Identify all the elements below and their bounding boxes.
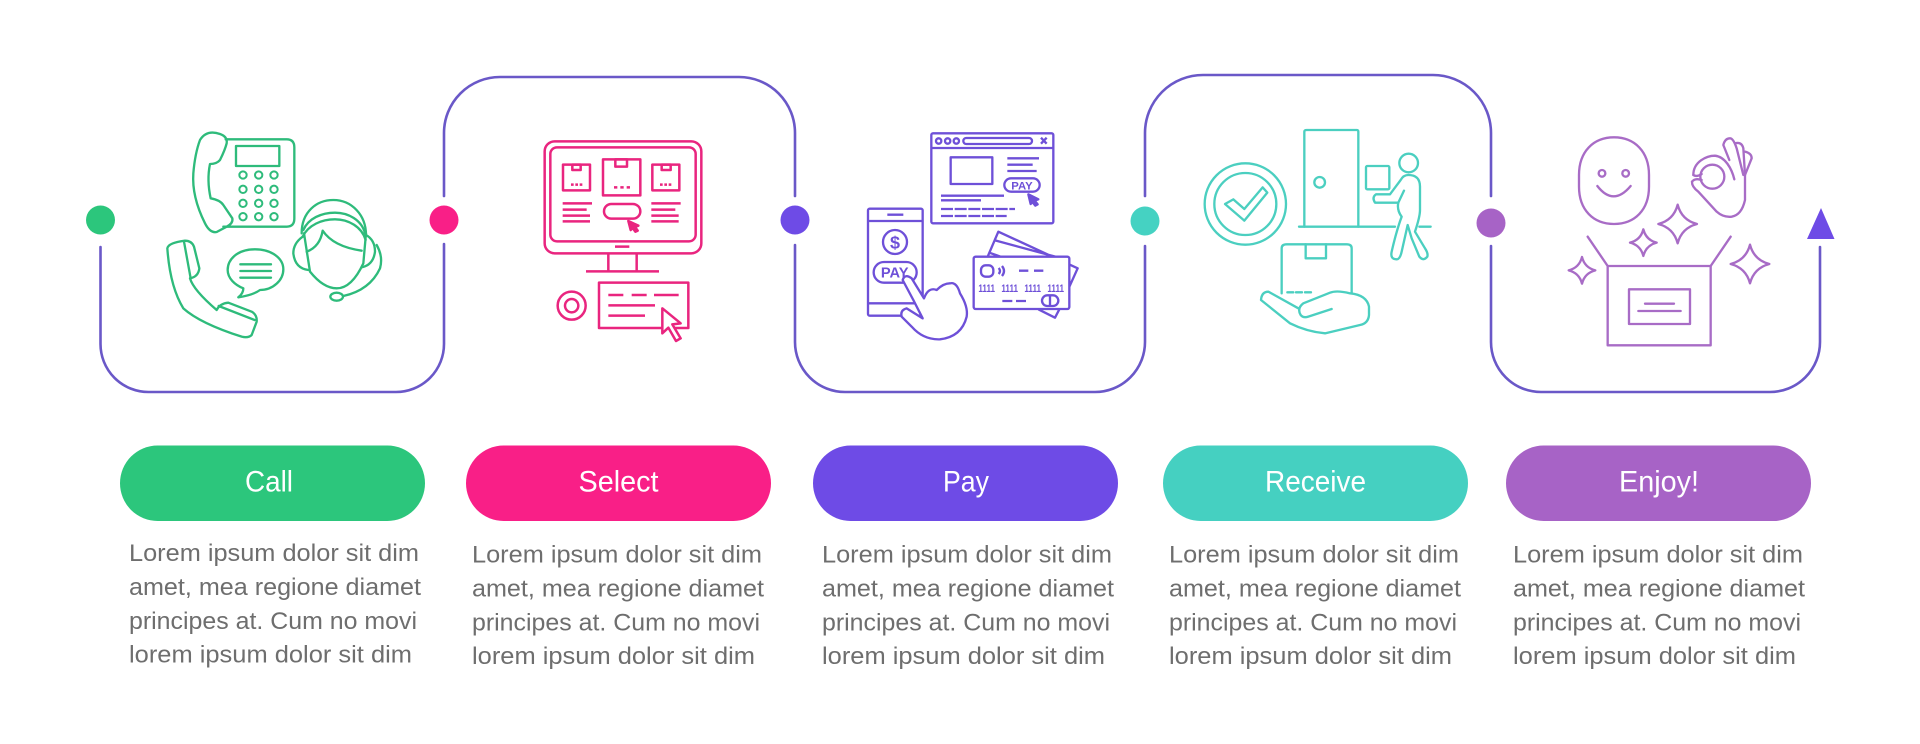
description: call: principes at. Cum no movi — [129, 608, 417, 635]
pill: Select — [466, 446, 771, 521]
timeline path — [100, 75, 1820, 392]
description: pay: principes at. Cum no movi — [822, 610, 1110, 637]
pill: Receive — [1163, 446, 1468, 521]
icon: receive — [1205, 130, 1431, 333]
description: select: Lorem ipsum dolor sit dim — [472, 542, 762, 569]
timeline node: call — [86, 206, 115, 234]
description: receive: principes at. Cum no movi — [1169, 610, 1457, 637]
icon: pay: 1111 — [1047, 283, 1064, 295]
description: enjoy: principes at. Cum no movi — [1513, 610, 1801, 637]
description: pay: amet, mea regione diamet — [822, 576, 1114, 603]
description: pay: lorem ipsum dolor sit dim — [822, 643, 1105, 670]
description: enjoy: amet, mea regione diamet — [1513, 576, 1805, 603]
icon: pay: 1111 — [1024, 283, 1041, 295]
pill: Enjoy: Enjoy! — [1619, 466, 1699, 498]
pill: Call: Call — [245, 466, 293, 498]
pill: Pay: Pay — [943, 466, 989, 498]
timeline node: enjoy — [1476, 208, 1506, 238]
icon: pay: $ — [890, 232, 900, 252]
description: enjoy: Lorem ipsum dolor sit dim — [1513, 542, 1803, 569]
description: call: amet, mea regione diamet — [129, 574, 421, 601]
description: call: Lorem ipsum dolor sit dim — [129, 540, 419, 567]
pill: Enjoy — [1506, 446, 1811, 521]
icon: pay: 1111 — [978, 283, 995, 295]
icon: pay — [868, 133, 1078, 339]
icon: pay: PAY — [881, 266, 909, 282]
icon: select — [545, 141, 701, 341]
description: call — [129, 540, 421, 668]
icon: enjoy — [1569, 137, 1769, 345]
pill: Receive: Receive — [1265, 466, 1366, 498]
pill: Call — [120, 446, 425, 521]
icon: call — [167, 133, 381, 337]
description: receive: lorem ipsum dolor sit dim — [1169, 643, 1452, 670]
description: call: lorem ipsum dolor sit dim — [129, 642, 412, 668]
description: pay: Lorem ipsum dolor sit dim — [822, 542, 1112, 569]
pill: Pay — [813, 446, 1118, 521]
description: select: principes at. Cum no movi — [472, 610, 760, 637]
description: receive — [1169, 542, 1461, 670]
timeline node: select — [430, 206, 458, 234]
icon: pay: 1111 — [1001, 283, 1018, 295]
timeline node: pay — [780, 206, 810, 234]
description: enjoy — [1513, 542, 1805, 670]
description: pay — [822, 542, 1114, 670]
description: select: lorem ipsum dolor sit dim — [472, 643, 755, 670]
timeline node: receive — [1130, 206, 1160, 236]
pill: Select: Select — [578, 466, 659, 498]
description: select: amet, mea regione diamet — [472, 576, 764, 603]
description: receive: Lorem ipsum dolor sit dim — [1169, 542, 1459, 569]
icon: pay: PAY — [1011, 180, 1033, 192]
description: receive: amet, mea regione diamet — [1169, 576, 1461, 603]
arrow head — [1807, 208, 1834, 239]
description: select — [472, 542, 764, 670]
description: enjoy: lorem ipsum dolor sit dim — [1513, 643, 1796, 670]
